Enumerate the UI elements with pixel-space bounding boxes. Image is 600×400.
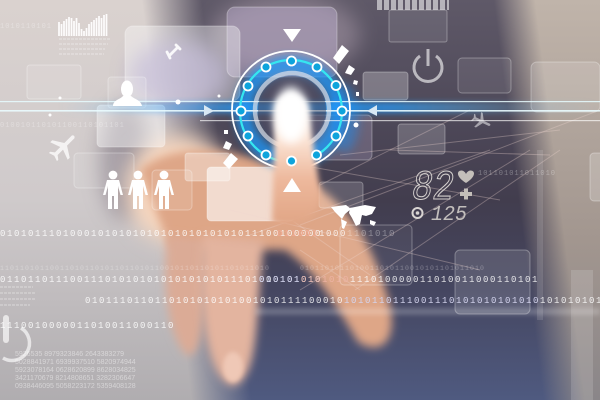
wrench icon bbox=[167, 45, 180, 58]
binary ticker rows: 1010110101 bbox=[0, 23, 52, 31]
power icon bottom left bbox=[3, 318, 30, 361]
digital readout 82 with heart: 82 bbox=[412, 164, 454, 212]
blurred hand bbox=[126, 136, 392, 386]
binary data rows: 010101 bbox=[259, 275, 301, 285]
binary data rows: 011001 bbox=[277, 229, 319, 239]
binary ticker rows: 101101011011010 bbox=[478, 170, 556, 178]
number block: 5923078164 0628620899 8628034825 bbox=[15, 367, 136, 374]
number block: 0938446095 5058223172 5359408128 bbox=[15, 383, 136, 390]
bar chart icon bbox=[59, 14, 106, 36]
faint binary rows: 0101101011010011010110010101101011010 bbox=[300, 265, 485, 272]
faint binary rows: 110110101100110101101011011010110010110110101101011010 bbox=[0, 265, 270, 272]
pointing index finger bbox=[272, 87, 320, 225]
faint binary rows bbox=[0, 265, 485, 272]
plane icon right bbox=[469, 110, 494, 133]
number block: 5028841971 6939937510 5820974944 bbox=[15, 359, 136, 366]
dial nodes bbox=[236, 56, 346, 166]
barcode panel bbox=[377, 0, 449, 10]
binary data rows: 111010000011010011000110101 bbox=[350, 275, 539, 285]
binary data rows: 0110110111001110101010101010101011101000101010 bbox=[0, 275, 322, 285]
blurred bottom data band bbox=[255, 308, 600, 315]
chart caption lines bbox=[59, 39, 111, 54]
blue dial glow bbox=[244, 65, 359, 159]
binary data rows: 0101110110110101010101001010111100010 bbox=[85, 296, 344, 306]
faint lines left block bbox=[0, 287, 36, 305]
binary ticker rows bbox=[0, 23, 556, 178]
power icon top right bbox=[414, 49, 442, 81]
binary data rows: 1101010 bbox=[347, 229, 396, 239]
world map icon bbox=[331, 205, 376, 229]
binary data rows: 1000 bbox=[319, 229, 347, 239]
binary data rows bbox=[0, 229, 600, 331]
right vertical ticker bbox=[537, 150, 543, 320]
circular target dial bbox=[232, 51, 350, 169]
binary data rows: 0101011101000101010101010101010101011100100000 bbox=[0, 229, 322, 239]
number block: 5926535 8979323846 2643383279 bbox=[15, 351, 124, 358]
number block bbox=[15, 351, 136, 390]
small readout 125 with target: 125 bbox=[431, 204, 467, 227]
small readout 125 with target bbox=[412, 204, 467, 227]
person icon bbox=[113, 80, 142, 106]
number block: 3421170679 8214808651 3282306647 bbox=[15, 375, 135, 382]
binary data rows: 1110010000011010011000110 bbox=[0, 321, 175, 331]
perspective grid bbox=[230, 110, 600, 290]
binary data rows: 1010110111001110101010101010 bbox=[344, 296, 540, 306]
binary data rows: 0101010 bbox=[301, 275, 350, 285]
dial tick marks bbox=[223, 45, 359, 169]
binary ticker rows: 010010110101100110101101 bbox=[0, 122, 125, 130]
dial triangle pointers bbox=[283, 29, 301, 192]
group of three people icons bbox=[103, 171, 174, 209]
horizontal light beam bbox=[0, 94, 600, 128]
plane icon left bbox=[44, 127, 83, 166]
